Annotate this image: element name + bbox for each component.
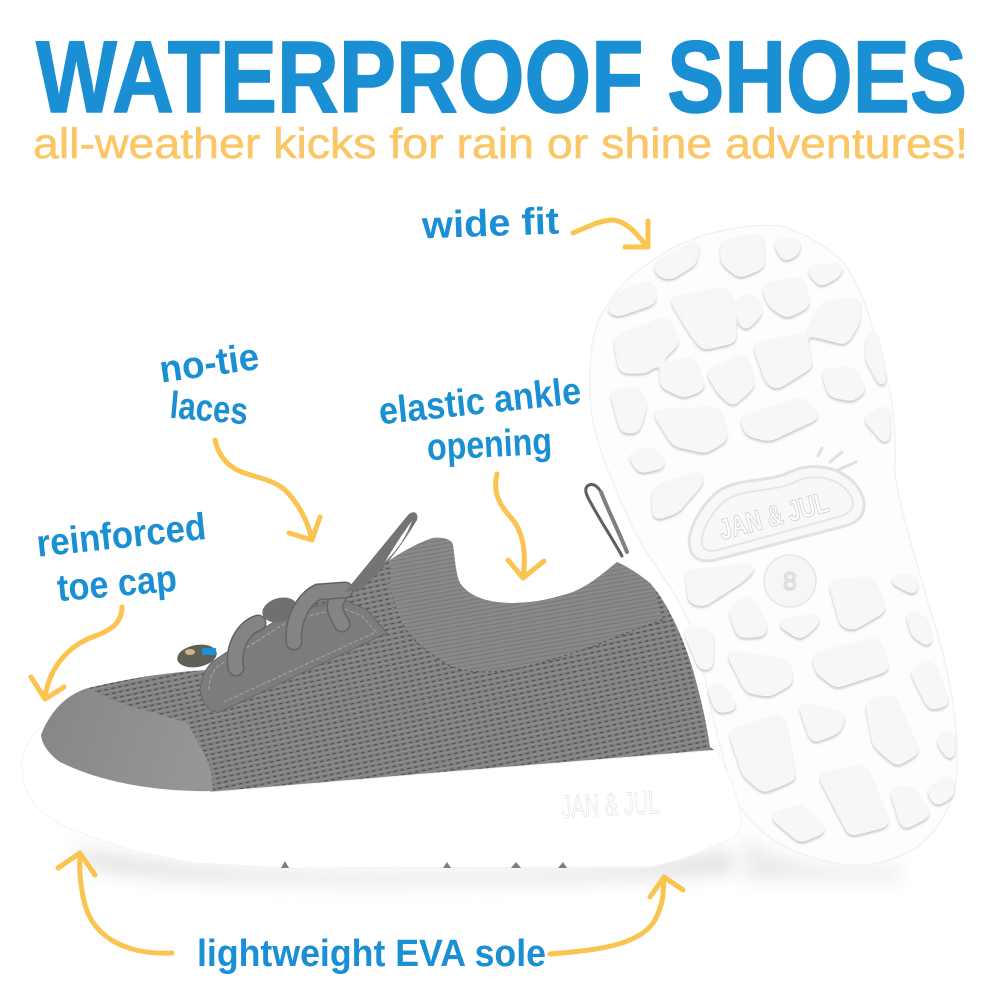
sole logo text: JAN & JUL <box>716 487 832 547</box>
arrow: elastic ankle <box>496 474 544 578</box>
midsole logo: JAN & JUL <box>560 784 660 825</box>
midsole tread notches <box>281 861 567 868</box>
label: elastic ankle opening: elastic ankle <box>377 370 583 433</box>
label: no-tie laces: laces <box>168 385 250 433</box>
arrow: wide fit <box>573 220 648 247</box>
label: no-tie laces <box>157 336 320 540</box>
label: no-tie laces: no-tie <box>157 336 262 392</box>
lace toggle <box>175 642 219 670</box>
plaque stitching <box>209 608 376 702</box>
side shoe <box>22 484 742 868</box>
sole size badge: 8 <box>783 568 797 596</box>
label: reinforced toe cap <box>31 506 208 699</box>
ground shadow <box>70 835 900 884</box>
laces <box>235 512 417 668</box>
label: reinforced toe cap: reinforced <box>35 506 208 566</box>
pull loop <box>586 484 627 556</box>
lace plaque <box>200 600 387 712</box>
shoe sole view <box>590 225 957 865</box>
label: wide fit <box>420 201 648 247</box>
mesh upper <box>88 538 717 794</box>
sole tread lugs: heel <box>687 567 951 839</box>
arrow: no-tie laces <box>215 440 320 540</box>
label: lightweight EVA sole: lightweight EVA sole <box>197 933 546 975</box>
white midsole <box>22 725 742 868</box>
grey toe cap <box>41 688 213 791</box>
label: elastic ankle opening: opening <box>426 421 553 469</box>
subtitle: all-weather kicks for rain or shine adventures! <box>33 120 968 168</box>
label: elastic ankle opening <box>377 370 583 578</box>
arrow: sole right <box>550 877 683 954</box>
heel stitch line <box>403 620 663 672</box>
arrow: toe cap <box>31 607 122 699</box>
sole logo plaque <box>689 448 864 561</box>
label: reinforced toe cap: toe cap <box>55 558 179 610</box>
arrow: sole left <box>58 853 172 953</box>
sole size badge <box>764 555 816 607</box>
ankle knit band <box>390 538 663 672</box>
sole tread lugs: forefoot <box>611 237 886 516</box>
label: wide fit: wide fit <box>420 201 560 247</box>
label: lightweight EVA sole <box>58 853 683 975</box>
sole outline <box>590 225 957 865</box>
